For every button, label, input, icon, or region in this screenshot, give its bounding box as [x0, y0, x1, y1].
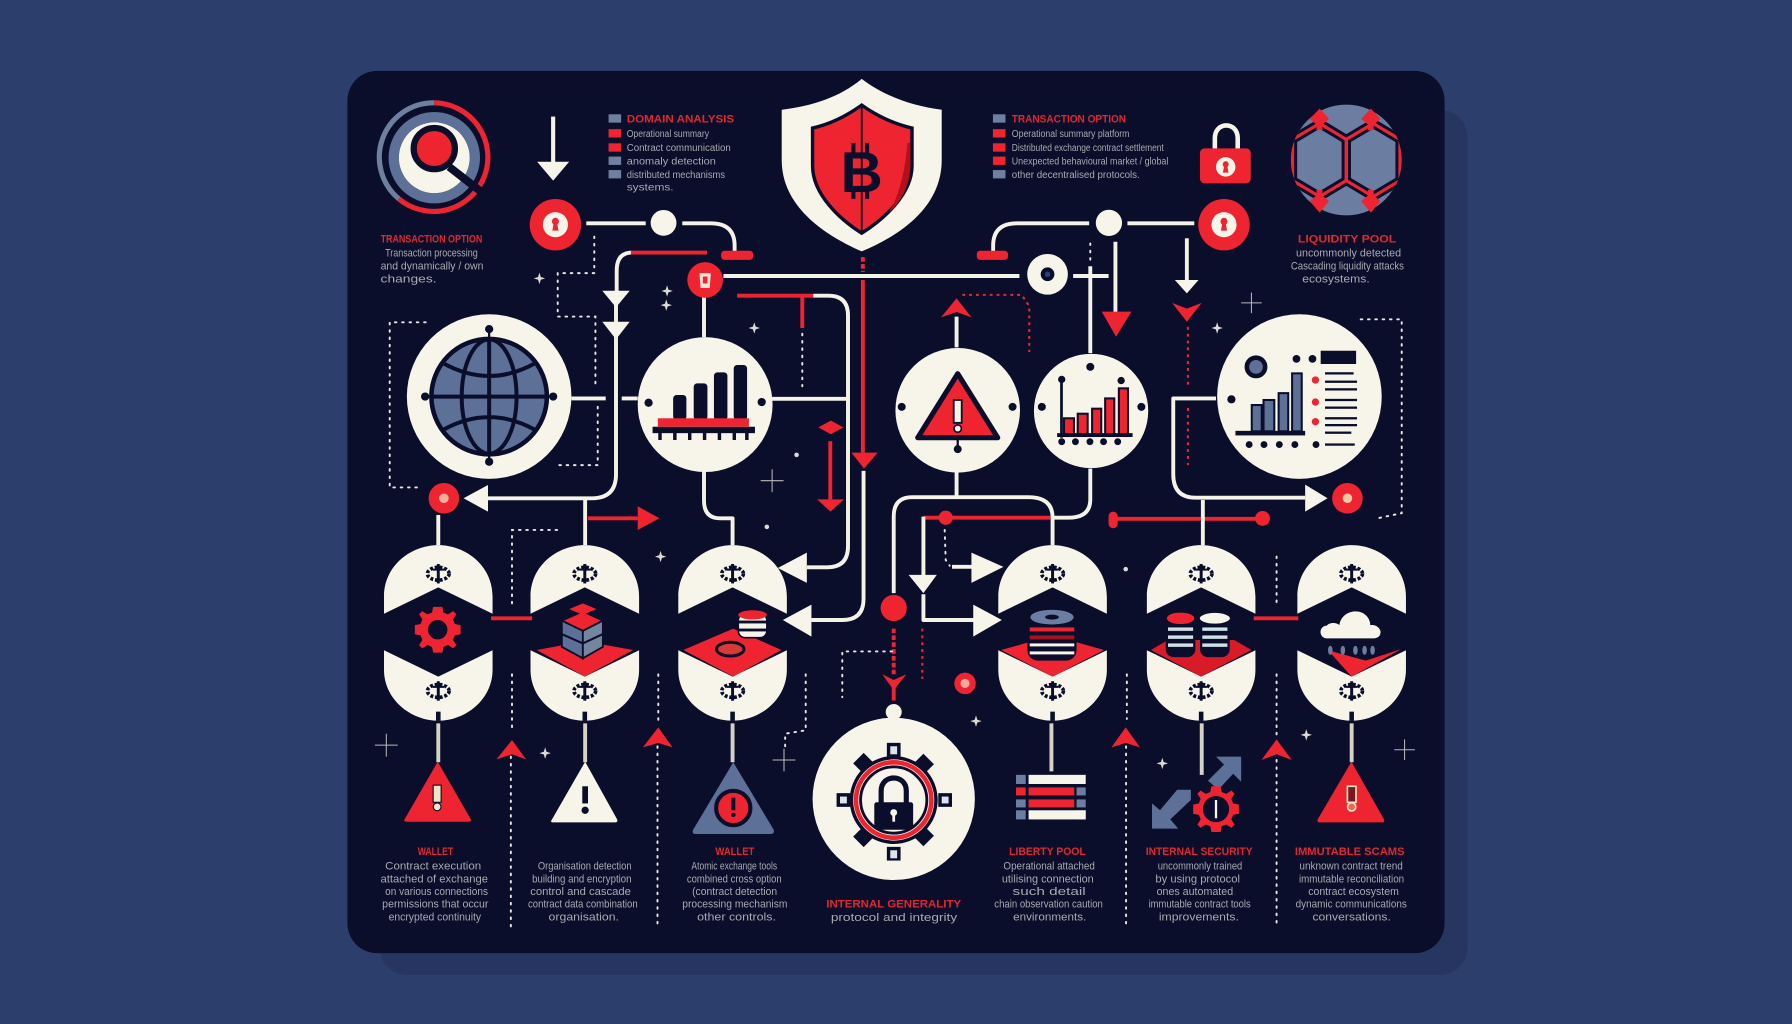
- chart: red rising bars circle: [1034, 354, 1148, 468]
- legend: domain analysis: Operational summary: [627, 129, 710, 140]
- icon: blue warning 3: [693, 762, 774, 834]
- node: red line dot: [939, 511, 953, 525]
- panel shadow: [379, 110, 1467, 975]
- capsule 1: gear: [384, 545, 493, 721]
- node: cream junction right: [1096, 210, 1122, 236]
- icon: cream warning 2: [551, 762, 617, 822]
- node: cream top of gear lock: [886, 704, 902, 720]
- text column 1: Contract execution: [385, 861, 481, 873]
- chart: bars circle: [638, 337, 773, 472]
- icon: red warning 1: [404, 762, 471, 822]
- icon: warning circle: [895, 348, 1020, 473]
- capsule 5: double coin stack: [1147, 545, 1255, 721]
- icon: hexagon network: [1291, 105, 1402, 215]
- capsule 3: coins: [678, 545, 787, 721]
- node: cream junction left: [651, 210, 676, 236]
- legend: transaction option: Distributed exchange contract settlement: [1012, 143, 1164, 154]
- text column 1: attached of exchange: [381, 874, 488, 886]
- text column 1: encrypted continuity: [389, 912, 482, 924]
- caption: transaction option: Transaction processing: [385, 248, 478, 260]
- node: small red left: [429, 483, 459, 514]
- legend: transaction option: [993, 113, 1168, 181]
- text column center: [826, 898, 962, 924]
- text column 6: [1295, 846, 1407, 924]
- text column 6: dynamic communications: [1296, 898, 1407, 910]
- text column 2: contract data combination: [528, 898, 638, 910]
- icon: globe circle: [407, 314, 571, 479]
- node: red center junction: [881, 595, 907, 621]
- node: red pill right: [977, 251, 1008, 260]
- text column 3: Atomic exchange tools: [691, 861, 778, 873]
- icon: magnifier ring: [379, 103, 488, 211]
- icon: red padlock: [1200, 125, 1251, 183]
- arrow: white down: [537, 117, 569, 181]
- text column 1: permissions that occur: [382, 898, 489, 910]
- capsule 6: cloud: [1297, 545, 1406, 721]
- icon: gear with arrows: [1152, 757, 1241, 832]
- caption: liquidity pool: uncommonly detected: [1296, 248, 1401, 260]
- text column 2: organisation.: [549, 912, 619, 924]
- caption: liquidity pool: LIQUIDITY POOL: [1298, 233, 1396, 245]
- text column 1: on various connections: [385, 886, 488, 898]
- text column 5: by using protocol: [1155, 874, 1240, 886]
- text column 6: conversations.: [1312, 912, 1391, 924]
- text column 6: IMMUTABLE SCAMS: [1295, 846, 1405, 858]
- legend: transaction option: other decentralised protocols.: [1012, 170, 1140, 181]
- text column 4: chain observation caution: [994, 898, 1103, 910]
- icon: gear lock circle: [813, 718, 975, 880]
- text column 3: WALLET: [715, 846, 754, 858]
- legend: domain analysis: DOMAIN ANALYSIS: [627, 113, 735, 125]
- chart: dashboard circle: [1217, 314, 1382, 479]
- connector lines: [438, 223, 1352, 775]
- icon: server table: [1016, 775, 1086, 819]
- text column 3: other controls.: [697, 912, 776, 924]
- text column 6: unknown contract trend: [1299, 861, 1403, 873]
- text column 2: building and encryption: [532, 874, 632, 886]
- text column 2: control and cascade: [530, 886, 631, 898]
- legend: domain analysis: distributed mechanisms: [627, 170, 725, 181]
- text column 5: uncommonly trained: [1158, 861, 1242, 873]
- sparkle stars: [375, 273, 1415, 771]
- text column 5: immutable contract tools: [1149, 898, 1251, 910]
- legend: transaction option: TRANSACTION OPTION: [1012, 113, 1126, 125]
- text column 5: [1146, 846, 1253, 924]
- text column center: protocol and integrity: [831, 912, 958, 924]
- arrowheads: [464, 280, 1328, 760]
- text column 1: [381, 846, 489, 924]
- text column 6: contract ecosystem: [1308, 886, 1399, 898]
- text column 4: Operational attached: [1003, 861, 1095, 873]
- text column 3: [682, 846, 787, 924]
- text column 3: (contract detection: [692, 886, 777, 898]
- node: red badge: [687, 262, 723, 298]
- caption: transaction option: [381, 233, 483, 285]
- node: red lock left: [530, 199, 581, 250]
- node: small red target: [954, 673, 976, 694]
- caption: transaction option: changes.: [381, 273, 437, 285]
- text column 2: [528, 861, 638, 924]
- caption: transaction option: and dynamically / own: [381, 261, 483, 273]
- capsule 2: block: [531, 545, 639, 721]
- text column 4: [994, 846, 1103, 924]
- text column 4: utilising connection: [1002, 874, 1094, 886]
- legend: transaction option: Operational summary platform: [1012, 129, 1129, 140]
- legend: domain analysis: [609, 113, 735, 194]
- caption: liquidity pool: Cascading liquidity attacks: [1291, 261, 1404, 273]
- text column 5: ones automated: [1157, 886, 1233, 898]
- text column 2: Organisation detection: [538, 861, 632, 873]
- caption: transaction option: TRANSACTION OPTION: [381, 233, 482, 245]
- text column 4: LIBERTY POOL: [1009, 846, 1086, 858]
- legend: transaction option: Unexpected behavioural market / global: [1012, 157, 1168, 168]
- caption: liquidity pool: [1291, 233, 1404, 285]
- text column 4: environments.: [1013, 912, 1086, 924]
- text column 5: improvements.: [1159, 912, 1239, 924]
- main dark panel: [347, 71, 1445, 953]
- node: red lock right: [1198, 199, 1250, 250]
- node: red pill left: [721, 251, 753, 260]
- text column 4: such detail: [1013, 886, 1086, 898]
- legend: domain analysis: anomaly detection: [627, 157, 716, 168]
- legend: domain analysis: systems.: [627, 183, 674, 194]
- text column center: INTERNAL GENERALITY: [826, 898, 962, 910]
- text column 1: WALLET: [418, 846, 453, 858]
- icon: red warning 6: [1317, 762, 1384, 822]
- node: red line ends: [1109, 511, 1270, 528]
- text column 5: INTERNAL SECURITY: [1146, 846, 1253, 858]
- text column 3: processing mechanism: [682, 898, 787, 910]
- node: small red right: [1332, 483, 1363, 514]
- legend: domain analysis: Contract communication: [627, 143, 731, 154]
- icon: bitcoin shield: B: [841, 141, 883, 205]
- text column 3: combined cross option: [687, 874, 782, 886]
- capsule 4: disk stack: [998, 545, 1107, 721]
- caption: liquidity pool: ecosystems.: [1302, 273, 1370, 285]
- dotted guide lines: [390, 237, 1402, 928]
- node: eye ring: [1027, 254, 1068, 295]
- icon: bitcoin shield: [782, 79, 942, 251]
- text column 6: immutable reconciliation: [1299, 874, 1404, 886]
